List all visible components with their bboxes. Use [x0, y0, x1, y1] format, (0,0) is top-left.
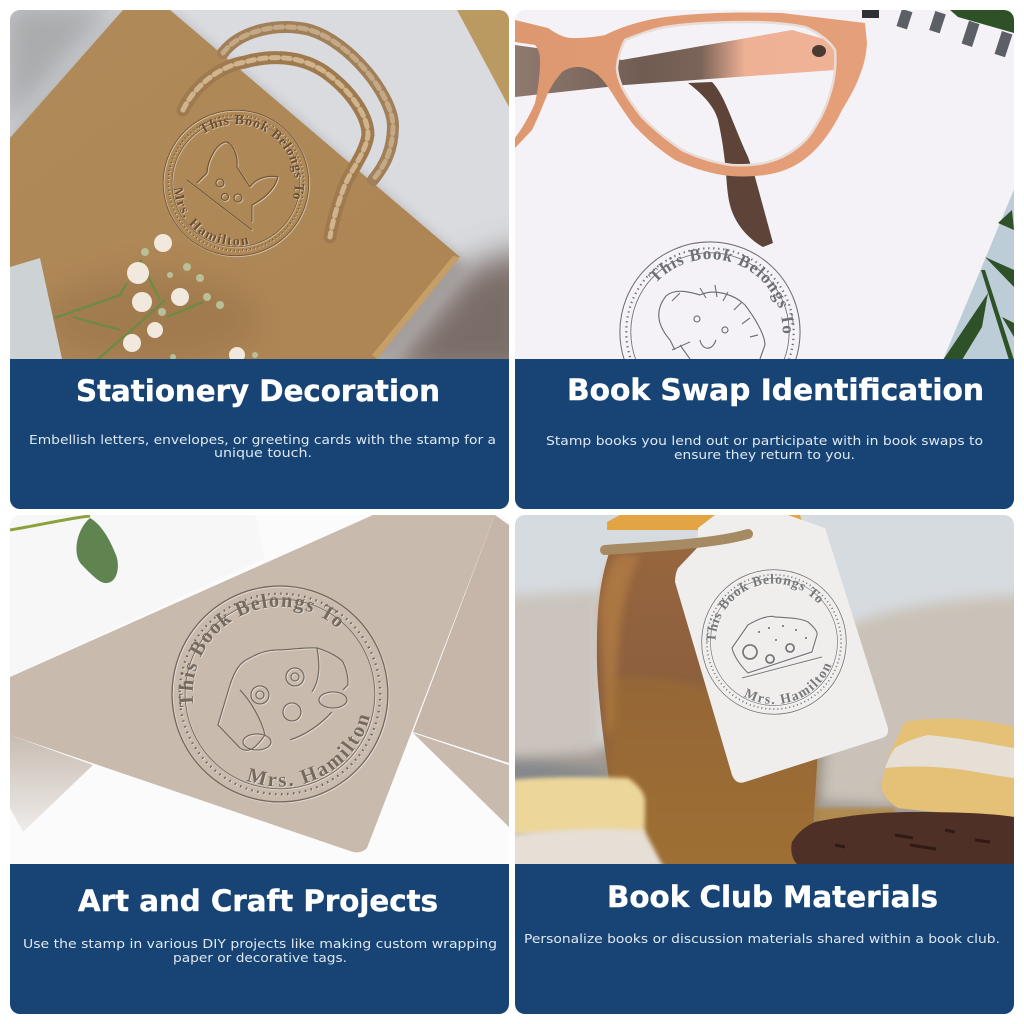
description: Personalize books or discussion materials shared within a book club.	[524, 932, 1000, 947]
caption panel	[10, 864, 509, 1014]
stamp: corgi emblem: This Book Belongs To	[198, 114, 305, 200]
heading: Art and Craft Projects	[78, 884, 438, 918]
caption panel	[10, 359, 509, 509]
icon: rope handle	[183, 27, 393, 237]
stamp: spotted dog emblem: Mrs. Hamilton	[744, 664, 832, 704]
icon: coconut cookie right	[882, 719, 1014, 817]
heading: Book Swap Identification	[567, 373, 984, 407]
panel: art and craft projects	[10, 515, 509, 1014]
stamp: corgi emblem	[162, 110, 310, 258]
description	[546, 434, 983, 463]
panel: book swap identification	[515, 10, 1014, 509]
stamp: fluffy dog emblem: This Book Belongs To	[648, 248, 794, 334]
icon: leaf sprig	[10, 516, 118, 583]
description: Use the stamp in various DIY projects like making custom wrapping	[23, 937, 497, 952]
heading: Book Club Materials	[607, 880, 938, 914]
icon: coconut cookie left	[510, 777, 665, 870]
icon: hanging tag	[675, 515, 888, 783]
icon: spiral binding	[862, 9, 1012, 57]
icon: twine	[605, 534, 748, 550]
description: unique touch.	[214, 446, 312, 461]
caption panel	[515, 359, 1014, 509]
description	[29, 433, 496, 461]
photo: kraft bag	[10, 10, 509, 359]
stamp: spotted dog emblem: This Book Belongs To	[706, 574, 822, 642]
icon: palm leaves	[943, 10, 1014, 360]
panel: book club materials	[515, 515, 1014, 1014]
icon: chocolate cookie	[791, 812, 1014, 865]
stamp: corgi emblem: Mrs. Hamilton	[174, 186, 250, 246]
icon: baby's breath flowers	[55, 234, 258, 363]
description: Stamp books you lend out or participate with in book swaps to	[546, 434, 983, 449]
stamp: hound emblem: This Book Belongs To	[178, 594, 343, 708]
stamp: hound emblem: Mrs. Hamilton	[246, 715, 371, 788]
photo: notepad and glasses	[515, 10, 1014, 359]
caption panel	[515, 864, 1014, 1014]
description	[23, 937, 497, 966]
blurred blanket	[515, 586, 1014, 836]
description: paper or decorative tags.	[173, 951, 347, 966]
description: Embellish letters, envelopes, or greeting cards with the stamp for a	[29, 433, 496, 448]
stamp: hound emblem	[171, 585, 390, 804]
panel: stationery decoration	[10, 10, 509, 509]
photo: jar with tag	[515, 515, 1014, 864]
icon: glasses	[515, 12, 867, 247]
photo: beige envelope	[10, 515, 509, 852]
heading: Stationery Decoration	[76, 374, 440, 408]
description: ensure they return to you.	[674, 448, 855, 463]
icon: jar	[597, 515, 817, 864]
stamp: fluffy dog emblem	[619, 241, 801, 359]
stamp: spotted dog emblem	[701, 569, 847, 715]
